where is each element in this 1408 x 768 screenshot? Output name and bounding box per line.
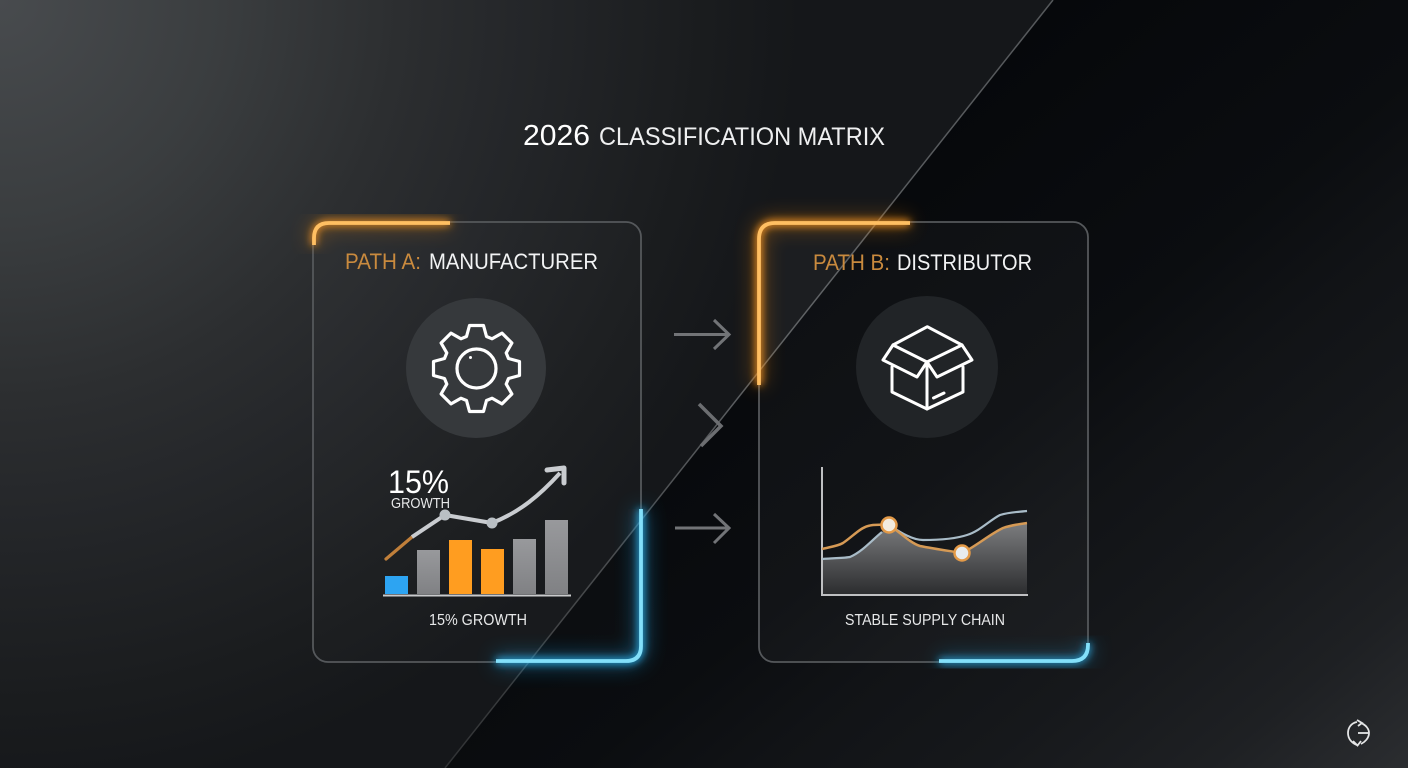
- heading: path B: PATH B:: [813, 250, 890, 275]
- heading: path A: PATH A:: [345, 249, 421, 274]
- chart callout: 15% growth: GROWTH: [391, 496, 450, 512]
- heading: distributor: DISTRIBUTOR: [897, 250, 1032, 275]
- title: CLASSIFICATION MATRIX: [599, 123, 885, 151]
- arrow: top: [674, 320, 729, 349]
- panel: path B distributor: [759, 222, 1088, 662]
- bar chart: growth: [383, 468, 571, 596]
- caption: 15% growth: 15% GROWTH: [429, 612, 527, 629]
- icon: corner logo: [1348, 720, 1369, 746]
- icon: gear: [406, 298, 546, 438]
- accent: blue corner B: [939, 643, 1088, 661]
- title: [523, 120, 885, 152]
- caption: stable supply chain: STABLE SUPPLY CHAIN: [845, 612, 1005, 629]
- panel: path A manufacturer: [313, 222, 641, 662]
- accent: orange corner B: [759, 223, 910, 385]
- heading: manufacturer: MANUFACTURER: [429, 249, 598, 274]
- area chart: supply chain: [822, 467, 1028, 595]
- icon: box: [856, 296, 998, 438]
- accent: blue corner A: [496, 509, 641, 661]
- arrow: bottom: [675, 514, 729, 543]
- accent: orange corner A: [314, 223, 450, 245]
- arrow: middle chevron: [699, 404, 721, 446]
- title: 2026: [523, 120, 590, 152]
- chart callout: 15% growth: 15%: [388, 464, 449, 500]
